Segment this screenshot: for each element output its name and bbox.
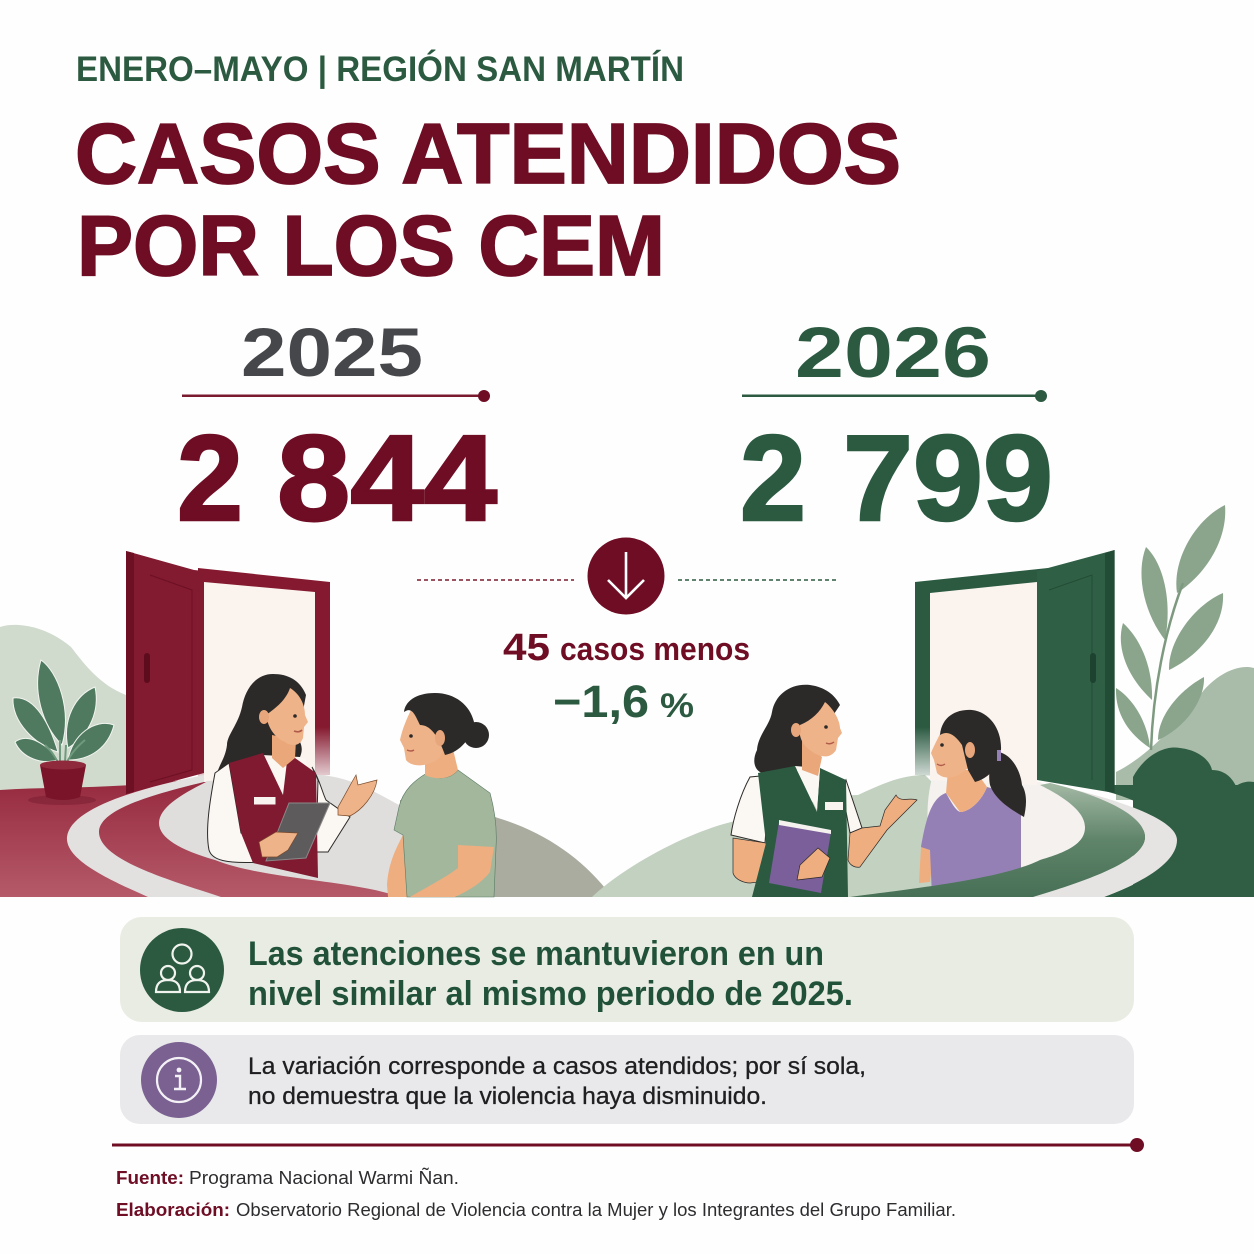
title (75, 107, 901, 294)
credit line: Observatorio Regional de Violencia contra la Mujer y los Integrantes del Grupo Familiar. (236, 1200, 956, 1220)
value 2026: 799 (843, 410, 1053, 546)
finding text (248, 935, 853, 1013)
percent change (553, 676, 694, 727)
white path right (1033, 783, 1177, 897)
potted plant (13, 660, 114, 805)
white path (67, 775, 221, 897)
source line: Fuente: (116, 1168, 184, 1188)
finding text: Las atenciones se mantuvieron en un (248, 935, 824, 973)
dark ground (1080, 785, 1254, 897)
icon: down arrow (588, 538, 664, 614)
counsellor with tablet (208, 674, 377, 878)
percent change: % (660, 687, 694, 725)
panel: 2025 figure (177, 314, 497, 546)
counsellor with book (731, 685, 917, 897)
credit line: Elaboración: (116, 1200, 230, 1220)
footer rule (112, 1138, 1144, 1152)
green path (850, 783, 1145, 897)
value 2025: 2 (177, 410, 243, 546)
illustration: left scene (0, 551, 612, 897)
green door (915, 550, 1115, 793)
icon: info (141, 1042, 217, 1118)
red floor (0, 776, 400, 897)
bush (1133, 747, 1254, 897)
value 2026: 2 (740, 410, 806, 546)
note text: La variación corresponde a casos atendidos; por sí sola, (248, 1053, 866, 1080)
year 2025: 2025 (241, 314, 423, 391)
source line: Programa Nacional Warmi Ñan. (189, 1167, 459, 1188)
note text (248, 1053, 866, 1110)
percent change: −1,6 (553, 676, 649, 727)
panel: caveat note (120, 1035, 1134, 1124)
cases fewer (503, 627, 750, 669)
hill behind left door (0, 625, 126, 790)
dark hill (400, 800, 612, 897)
back hill right (1116, 667, 1254, 800)
light green hill (592, 775, 950, 897)
woman in purple shirt (919, 710, 1026, 897)
note text: no demuestra que la violencia haya disminuido. (248, 1083, 767, 1110)
inner grey path (159, 775, 420, 893)
cases fewer: casos menos (560, 631, 750, 667)
title: POR LOS CEM (77, 199, 665, 294)
dashed connector left (417, 579, 574, 581)
value 2025: 844 (277, 410, 497, 546)
title: CASOS ATENDIDOS (75, 107, 901, 202)
red door (126, 551, 330, 794)
icon: people (140, 928, 224, 1012)
dashed connector right (678, 579, 838, 581)
seated woman in green shirt (387, 693, 496, 897)
pale ground near door (927, 778, 1085, 885)
variation indicator (417, 538, 838, 727)
rule 2026 (742, 390, 1047, 402)
panel: main finding (120, 917, 1134, 1022)
value 2025 (177, 410, 497, 546)
panel: 2026 figure (740, 314, 1053, 546)
rule 2025 (182, 390, 490, 402)
cases fewer: 45 (503, 627, 550, 669)
heading: period and region: ENERO–MAYO | REGIÓN SAN MARTÍN (76, 49, 684, 89)
large leafy plant (1116, 505, 1225, 750)
year 2026: 2026 (795, 314, 991, 393)
value 2026 (740, 410, 1053, 546)
illustration: right scene (592, 505, 1254, 897)
finding text: nivel similar al mismo periodo de 2025. (248, 975, 853, 1013)
